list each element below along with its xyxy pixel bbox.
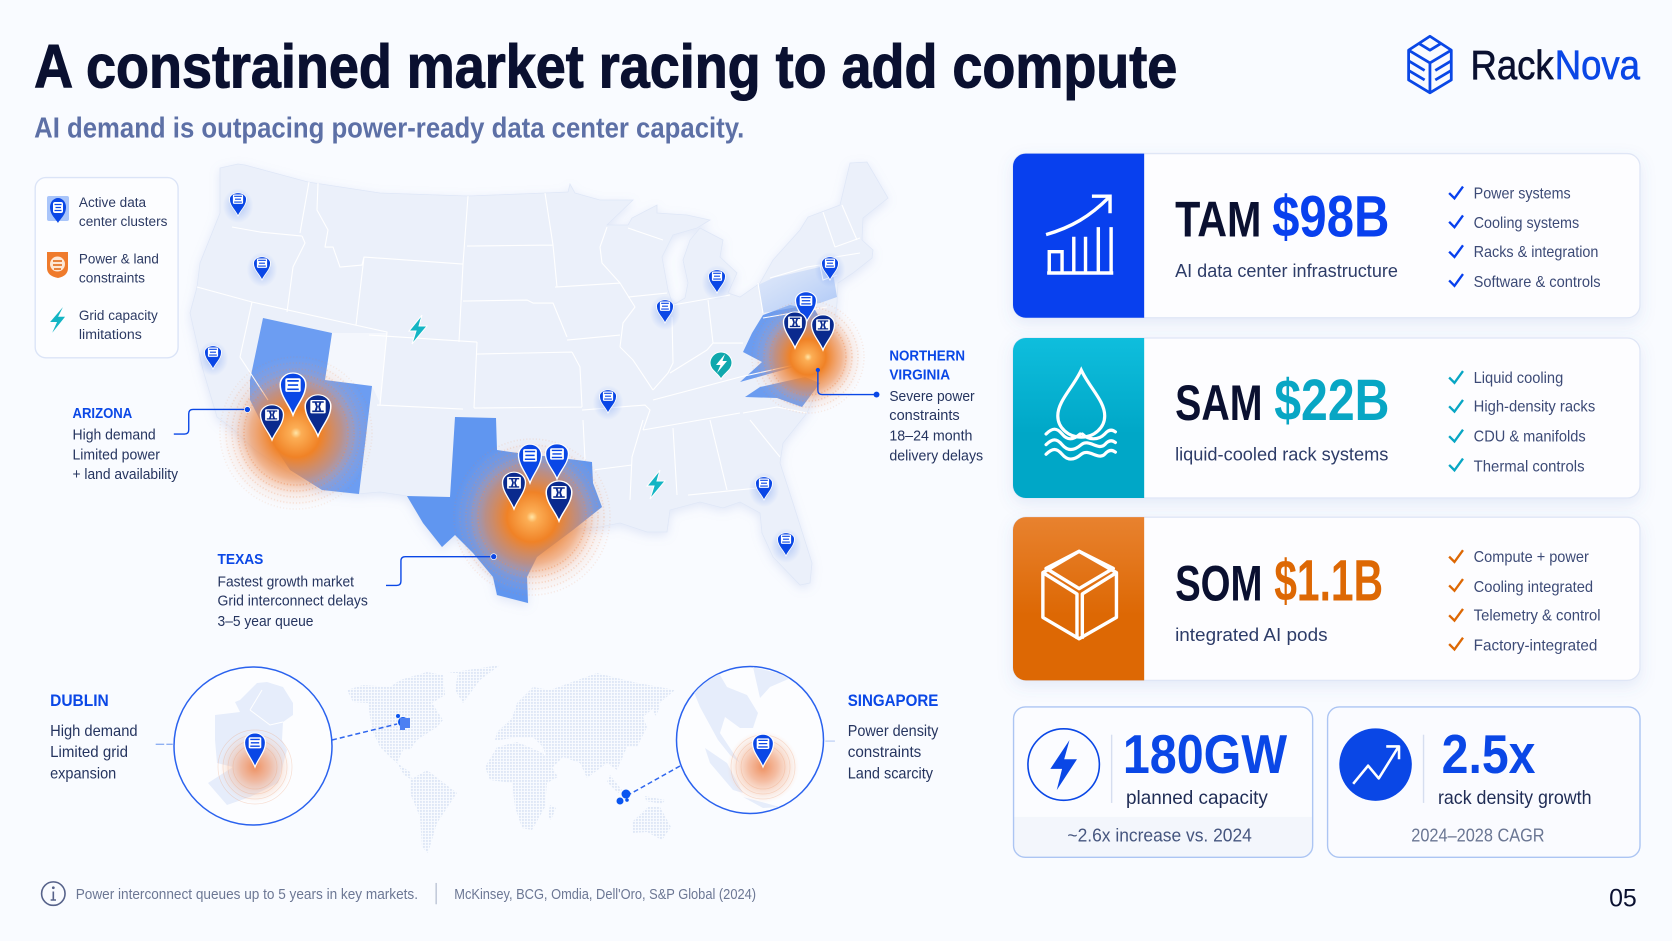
icon: trend circle xyxy=(1339,728,1412,801)
TAM value: $98B xyxy=(1272,185,1389,250)
callout: Arizona xyxy=(73,406,250,483)
text: constraints xyxy=(889,408,960,424)
SOM checklist xyxy=(1449,549,1601,654)
SAM label: SAM xyxy=(1175,375,1263,431)
heat glow xyxy=(730,734,796,800)
panel: SOM xyxy=(1013,517,1640,680)
heading: VIRGINIA xyxy=(889,368,950,384)
icon: server cube xyxy=(1409,36,1451,93)
callout: Dublin xyxy=(50,691,173,782)
text: + land availability xyxy=(73,467,179,483)
text: Severe power xyxy=(889,389,975,405)
heat glow xyxy=(222,735,288,800)
highlighted region: mid-Atlantic xyxy=(758,267,837,313)
legend item: power and land xyxy=(79,250,159,286)
logo: RackNova xyxy=(1409,36,1640,93)
page number: 05 xyxy=(1609,885,1637,912)
icon: power constraints xyxy=(47,252,68,278)
SOM checklist: Compute + power xyxy=(1474,549,1589,566)
callout: Texas xyxy=(218,552,497,630)
text: Limited power xyxy=(73,448,160,464)
text: Land scarcity xyxy=(848,765,933,782)
pins: Virginia cluster xyxy=(784,292,835,350)
icon: grid pin Kentucky xyxy=(710,352,732,379)
icon: active data center pin xyxy=(47,196,69,223)
text xyxy=(848,723,939,782)
legend item: active clusters: Active data xyxy=(79,194,146,210)
legend item: power and land: Power & land xyxy=(79,250,159,266)
note: ~2.6x increase vs. 2024 xyxy=(1067,825,1252,845)
SAM value: $22B xyxy=(1274,368,1389,433)
heading: NORTHERN xyxy=(889,348,965,364)
dashed connector: Dublin to world map xyxy=(332,714,410,740)
legend item: active clusters: center clusters xyxy=(79,213,167,229)
highlighted state: Virginia xyxy=(740,305,830,382)
value: 180GW xyxy=(1123,724,1288,785)
note: 2024–2028 CAGR xyxy=(1411,825,1545,845)
SOM checklist: Cooling integrated xyxy=(1474,579,1593,596)
text xyxy=(218,574,368,630)
SAM checklist xyxy=(1449,370,1595,475)
text xyxy=(889,389,983,465)
text: constraints xyxy=(848,744,922,761)
TAM checklist: Racks & integration xyxy=(1474,244,1598,261)
text: Fastest growth market xyxy=(218,574,354,590)
legend item: grid capacity: Grid capacity xyxy=(79,307,158,323)
text: High demand xyxy=(73,427,156,443)
SOM value: $1.1B xyxy=(1274,548,1383,613)
panel: legend xyxy=(35,178,178,358)
dashed connector: Singapore to world map xyxy=(617,766,680,805)
leader line xyxy=(386,554,497,585)
legend item: active clusters xyxy=(79,194,167,229)
SAM checklist: Thermal controls xyxy=(1474,458,1585,475)
heat glow: Northern Virginia xyxy=(752,301,864,413)
SAM checklist: High-density racks xyxy=(1474,399,1595,416)
icon: growth chart xyxy=(1046,196,1113,273)
SOM description: integrated AI pods xyxy=(1175,625,1328,645)
value: 2.5x xyxy=(1442,724,1536,785)
world dot map xyxy=(347,665,675,853)
heading: TEXAS xyxy=(218,552,264,568)
subtitle: AI demand is outpacing power-ready data center capacity. xyxy=(34,113,744,145)
SAM checklist: Liquid cooling xyxy=(1474,370,1563,387)
icon: info xyxy=(42,882,65,905)
SAM checklist: CDU & manifolds xyxy=(1474,428,1586,445)
heat glow: Texas xyxy=(454,439,610,595)
heading xyxy=(889,348,965,384)
callout: Northern Virginia xyxy=(816,348,983,465)
legend item: power and land: constraints xyxy=(79,270,145,286)
text: Limited grid xyxy=(50,744,128,761)
TAM checklist: Power systems xyxy=(1474,185,1571,202)
US map xyxy=(190,162,888,603)
heading: DUBLIN xyxy=(50,691,109,710)
leader xyxy=(825,740,835,742)
label: planned capacity xyxy=(1126,787,1268,809)
inset: Dublin xyxy=(174,667,332,825)
TAM checklist: Cooling systems xyxy=(1474,215,1579,232)
panel: rack density stat xyxy=(1328,707,1640,857)
legend item: grid capacity: limitations xyxy=(79,326,142,342)
pin xyxy=(245,733,266,767)
heading: ARIZONA xyxy=(73,406,132,422)
text xyxy=(50,723,138,782)
highlighted states: Nevada and Arizona xyxy=(250,318,372,494)
text: expansion xyxy=(50,765,116,782)
SOM checklist: Factory-integrated xyxy=(1474,637,1597,654)
highlighted state: North Carolina xyxy=(745,377,820,407)
icon: bolt in circle xyxy=(1028,729,1099,800)
label: rack density growth xyxy=(1438,787,1591,809)
panel: planned capacity stat xyxy=(1014,707,1313,857)
pins: Arizona cluster xyxy=(261,373,331,440)
panel: TAM xyxy=(1013,154,1640,318)
legend item: grid capacity xyxy=(79,307,158,342)
wordmark: Nova: Nova xyxy=(1555,42,1640,88)
footer note xyxy=(42,882,756,905)
inset: Singapore xyxy=(677,667,824,814)
leader line xyxy=(816,368,880,398)
icon: grid bolt Mississippi xyxy=(647,470,665,499)
text: High demand xyxy=(50,723,138,740)
title: A constrained market racing to add compute xyxy=(34,32,1177,100)
text: Grid interconnect delays xyxy=(218,594,368,610)
pale Utah patch xyxy=(325,333,387,403)
Southeast Asia land xyxy=(693,667,793,808)
heading: SINGAPORE xyxy=(848,691,938,710)
icon: grid bolt xyxy=(50,307,65,333)
pins: Texas cluster xyxy=(503,444,572,521)
land outline xyxy=(190,162,888,603)
text: delivery delays xyxy=(889,449,983,465)
SOM checklist: Telemetry & control xyxy=(1474,608,1601,625)
text: Power density xyxy=(848,723,939,740)
TAM label: TAM xyxy=(1175,192,1261,248)
pins: small active clusters xyxy=(198,188,845,563)
TAM description: AI data center infrastructure xyxy=(1175,261,1398,281)
note text: Power interconnect queues up to 5 years in key markets. xyxy=(76,887,418,903)
TAM checklist: Software & controls xyxy=(1474,274,1601,291)
leader xyxy=(156,743,173,745)
leader line xyxy=(174,406,250,434)
sources: McKinsey, BCG, Omdia, Dell'Oro, S&P Global (2024) xyxy=(454,887,756,903)
text: 3–5 year queue xyxy=(218,614,314,630)
icon: grid bolt Colorado xyxy=(409,315,427,344)
state borders xyxy=(197,182,860,500)
TAM checklist xyxy=(1449,185,1601,291)
pin xyxy=(753,734,774,767)
highlighted state: Texas xyxy=(407,417,602,603)
icon: cube xyxy=(1043,551,1116,639)
callout: Singapore xyxy=(825,691,939,782)
SOM label: SOM xyxy=(1175,555,1263,611)
text: 18–24 month xyxy=(889,428,972,444)
Ireland land xyxy=(208,682,293,805)
icon: water drop xyxy=(1046,370,1115,459)
text xyxy=(73,427,179,483)
SAM description: liquid-cooled rack systems xyxy=(1175,445,1388,465)
heat glow: Arizona xyxy=(220,357,372,509)
panel: SAM xyxy=(1013,338,1640,498)
wordmark: Rack: Rack xyxy=(1470,42,1554,88)
